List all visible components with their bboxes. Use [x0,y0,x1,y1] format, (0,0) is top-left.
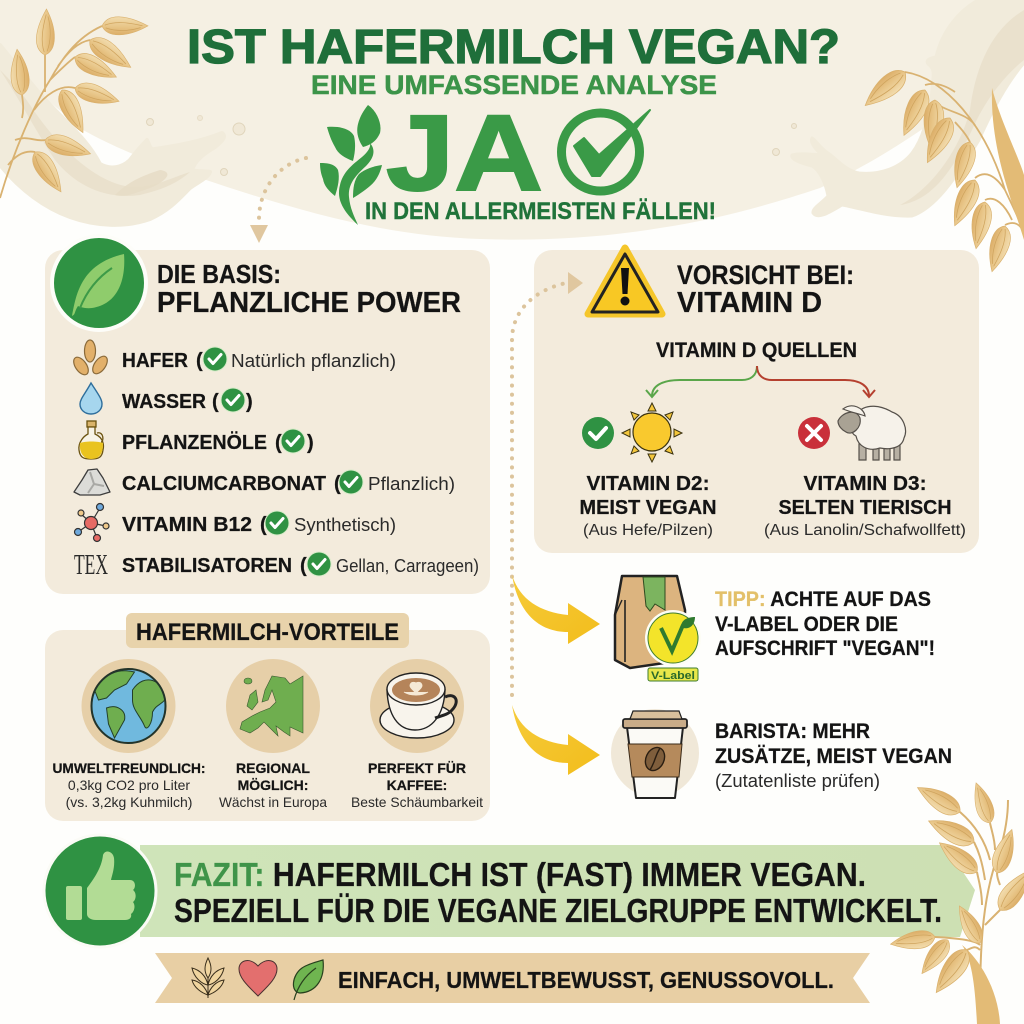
arrow: green branch [646,366,757,397]
heading: VORSICHT BEI: [677,260,854,290]
row: hafer: ( [196,350,203,372]
text: perfekt: PERFEKT FÜR [368,760,466,776]
text: perfekt: KAFFEE: [387,777,447,793]
panel: die basis [45,236,490,594]
row: stabilisatoren: Gellan, Carrageen) [336,556,479,576]
arrow: dotted to basis [250,158,306,243]
text: regional: MÖGLICH: [238,777,308,793]
panel: vorteile [45,613,490,821]
icon: heart [239,961,277,996]
text: vitamin d2: VITAMIN D2: [586,473,710,495]
text: umweltfreundlich [52,760,206,810]
row: wasser [122,388,253,413]
icon: water drop [80,383,102,414]
text: tipp: TIPP: ACHTE AUF DAS [715,588,931,611]
icon: globe [82,659,176,753]
arrow: red branch [757,366,875,397]
text: umweltfreundlich: 0,3kg CO2 pro Liter [68,777,190,793]
text: regional: Wächst in Europa [219,794,327,810]
heading [677,260,854,319]
oat sprig top right [859,65,1024,274]
icon: leaf badge [52,236,146,330]
text: tipp: AUFSCHRIFT "VEGAN"! [715,637,935,660]
text: fazit: FAZIT: HAFERMILCH IST (FAST) IMMER VEGAN. [174,856,866,893]
text: vitamin d2: (Aus Hefe/Pilzen) [583,522,713,539]
row: calciumcarbonat: Pflanzlich) [368,474,455,494]
row: pflanzenöle: PFLANZENÖLE [122,431,267,454]
icon: cross badge [798,417,830,449]
icon: sheep [838,406,906,460]
row: vitamin b12 [122,511,396,536]
header background [0,0,1024,240]
icon: sun [622,403,682,462]
text: regional [219,760,327,810]
icon: europe map [226,659,320,753]
milk splash left [0,45,245,225]
text: barista: BARISTA: MEHR [715,720,870,743]
icon: green sprout [320,105,382,225]
row: hafer: Natürlich pflanzlich) [231,351,396,371]
arrow: yellow to tip [512,575,600,644]
row: wasser: ) [246,391,253,413]
text: umweltfreundlich: UMWELTFREUNDLICH: [52,760,206,776]
row: calciumcarbonat [122,470,455,495]
row: vitamin b12: ( [260,514,267,536]
row: hafer: HAFER [122,350,189,372]
milk splash right [772,0,1024,216]
heading: DIE BASIS: [157,259,281,289]
title: IST HAFERMILCH VEGAN? [187,21,840,74]
icon: oil bottle [79,421,103,459]
text: perfekt: Beste Schäumbarkeit [351,794,483,810]
oat sprig bottom right [889,779,1024,1024]
icon: molecule [74,504,109,542]
oat sprig top left [0,9,148,198]
heading tag: HAFERMILCH-VORTEILE [136,619,399,646]
icon: coffee to go cup [611,709,699,798]
text: barista: ZUSÄTZE, MEIST VEGAN [715,745,952,768]
label: quellen: VITAMIN D QUELLEN [656,339,857,362]
row: calciumcarbonat: ( [334,473,341,495]
icon: check badge [582,417,614,449]
icon: latte cup [370,659,464,753]
icon: wheat [192,958,224,998]
text: vitamin d2 [580,473,716,539]
icon: oat bag with v-label [615,576,701,682]
heading [157,259,461,319]
row: calciumcarbonat: CALCIUMCARBONAT [122,473,326,495]
row: stabilisatoren [122,552,479,577]
icon: thumbs up [44,835,156,947]
icon: warning triangle [588,248,662,314]
panel: vitamin d [534,248,979,553]
icon: oats [71,340,110,377]
text: vitamin d3: SELTEN TIERISCH [778,497,952,519]
subtitle: EINE UMFASSENDE ANALYSE [311,70,717,100]
row: pflanzenöle [122,429,314,454]
text: vitamin d2: MEIST VEGAN [580,497,716,519]
text: vitamin d3: VITAMIN D3: [804,473,926,495]
row: vitamin b12: Synthetisch) [294,515,396,535]
icon: oat bag with v-label: V-Label [651,670,695,682]
row: stabilisatoren: ( [300,555,307,577]
text: summary: EINFACH, UMWELTBEWUSST, GENUSSOVOLL. [338,967,834,993]
answer qualifier: IN DEN ALLERMEISTEN FÄLLEN! [365,198,716,225]
icon: stabilizer symbol: TEX [74,550,108,581]
text: barista: (Zutatenliste prüfen) [715,771,880,791]
text: fazit [174,856,942,929]
row: stabilisatoren: STABILISATOREN [122,555,292,577]
row: wasser: ( [212,391,219,413]
text: tipp: V-LABEL ODER DIE [715,613,898,636]
text: umweltfreundlich: (vs. 3,2kg Kuhmilch) [66,794,192,810]
text: barista [715,720,952,791]
row: pflanzenöle: ) [307,432,314,454]
row: hafer [122,347,396,372]
text: perfekt [351,760,483,810]
row: wasser: WASSER [122,391,207,413]
text: vitamin d3 [764,473,966,539]
heading: VITAMIN D [677,287,822,319]
text: tipp [715,588,935,660]
banner: fazit [44,835,975,947]
row: vitamin b12: VITAMIN B12 [122,514,252,536]
icon: leaf [293,960,323,1000]
text: vitamin d3: (Aus Lanolin/Schafwollfett) [764,522,966,539]
arrow: yellow to barista [512,705,600,775]
icon: check circle [562,110,650,191]
row: pflanzenöle: ( [275,432,282,454]
answer JA: JA [386,92,543,213]
icon: rock [74,469,110,495]
ribbon: summary [155,953,870,1003]
text: regional: REGIONAL [236,760,310,776]
arrow: dotted to vitamin d [512,272,583,695]
heading: PFLANZLICHE POWER [157,287,461,319]
